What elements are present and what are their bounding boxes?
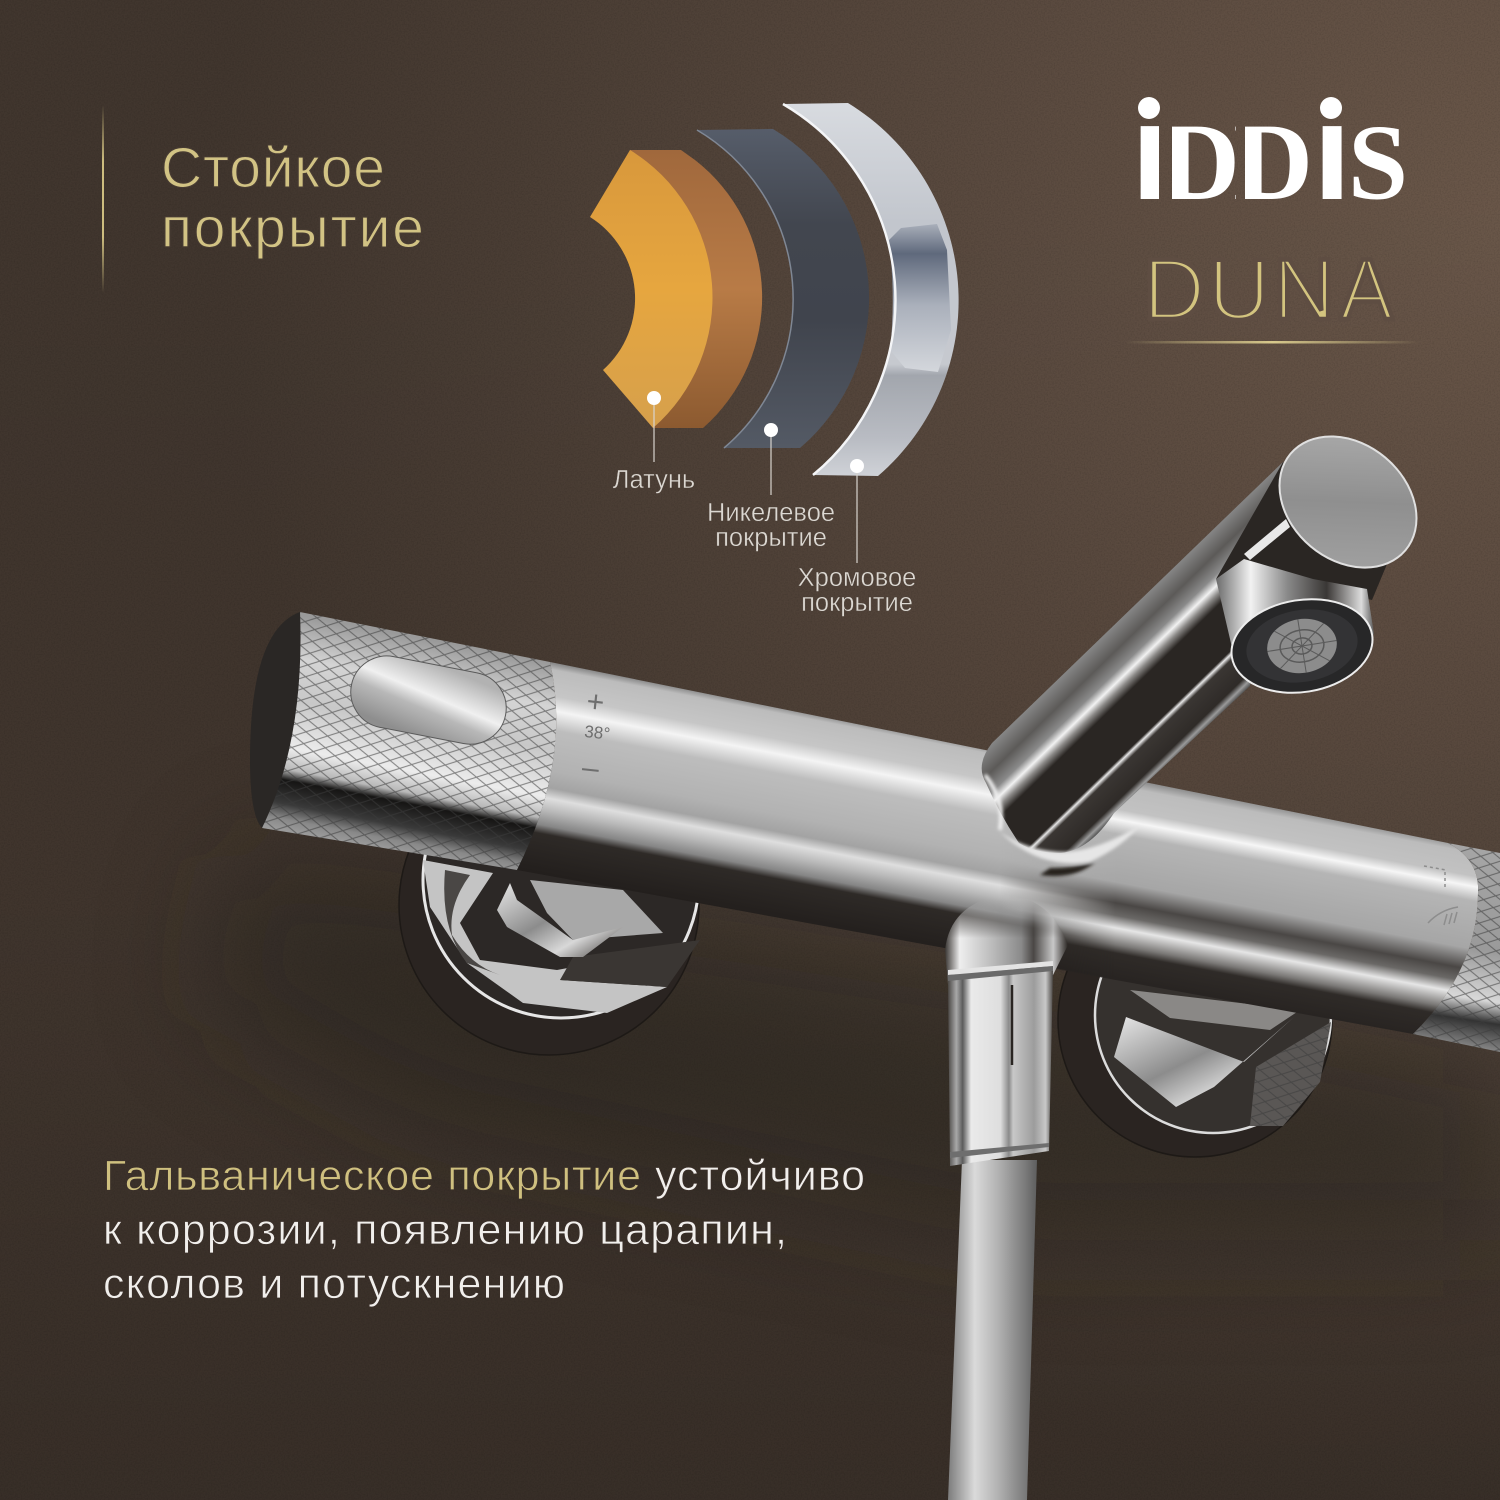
layer: chrome (783, 103, 959, 476)
body left section (517, 662, 1120, 980)
body right section (1006, 782, 1478, 1034)
callout: chrome: покрытие (801, 589, 913, 617)
logo: iddis: i (1131, 75, 1169, 229)
temperature scale: 38° (583, 722, 611, 744)
layer: nickel (697, 129, 869, 448)
description text (103, 1152, 865, 1308)
hose (948, 1160, 1037, 1500)
heading (161, 136, 424, 260)
callout: chrome (798, 459, 916, 617)
coating layers diagram (590, 103, 959, 617)
right wall mount (1058, 883, 1332, 1157)
neck (945, 903, 1067, 984)
callout: nickel: покрытие (715, 524, 827, 552)
series name: duna: D (1143, 242, 1205, 338)
logo: iddis: S (1348, 104, 1408, 222)
spout (982, 462, 1285, 876)
callout: brass (613, 391, 695, 494)
aerator (1225, 589, 1379, 703)
description text: устойчиво (655, 1152, 865, 1200)
description text: к коррозии, появлению царапин, (103, 1206, 787, 1254)
mixer collar (948, 961, 1053, 1166)
faucet (250, 409, 1500, 1500)
logo: iddis: D (1160, 101, 1240, 223)
logo underline (1125, 341, 1420, 344)
callout: chrome: Хромовое (798, 564, 916, 592)
left wall mount (399, 742, 700, 1055)
layer: brass (590, 150, 762, 428)
series name: duna: A (1340, 242, 1394, 338)
callout: brass: Латунь (613, 466, 695, 494)
logo: iddis: D (1234, 101, 1313, 223)
callout: nickel: Никелевое (707, 499, 835, 527)
spout head (1216, 409, 1443, 691)
temperature scale (578, 685, 615, 786)
series name: duna: U (1208, 242, 1270, 338)
heading: покрытие (161, 196, 424, 260)
temperature scale: – (580, 751, 601, 786)
temperature scale: + (585, 685, 606, 720)
mode icons (1424, 866, 1458, 925)
knurled handle left (250, 612, 556, 870)
accent line: heading (102, 105, 104, 293)
handle button (345, 650, 512, 750)
series name: duna: N (1273, 242, 1335, 338)
heading: Стойкое (161, 136, 385, 200)
series name: duna (1143, 242, 1394, 338)
description text: сколов и потускнению (103, 1260, 565, 1308)
logo: iddis (1138, 97, 1404, 200)
callout: nickel (707, 423, 835, 552)
knurled handle right (1413, 843, 1500, 1052)
description text: Гальваническое покрытие (103, 1152, 641, 1200)
logo: iddis: i (1313, 75, 1351, 229)
